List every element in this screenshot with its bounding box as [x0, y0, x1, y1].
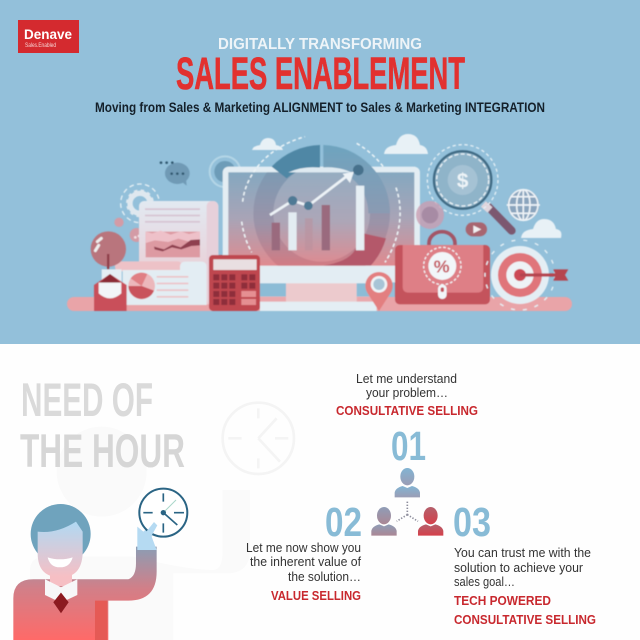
base bar [67, 297, 572, 311]
person 3 [418, 507, 443, 536]
step 3 text: solution to achieve your [454, 560, 584, 575]
step 3 text: sales goal… [454, 574, 515, 589]
briefcase with percent [395, 232, 490, 304]
bar chart [272, 186, 364, 250]
briefcase with percent: % [434, 257, 450, 277]
screen dial [254, 172, 390, 266]
magnifier with dollar [427, 145, 512, 231]
subtitle: Moving from Sales & Marketing ALIGNMENT to Sales & Marketing INTEGRATION [95, 100, 545, 115]
radar circle [210, 156, 240, 187]
location pin [365, 272, 393, 311]
lower panel background [0, 344, 640, 640]
step 2 text: the inherent value of [250, 554, 361, 569]
step 3 text [454, 545, 596, 627]
character with clock [13, 489, 187, 640]
person 1 [395, 468, 420, 497]
heading: digitally transforming: DIGITALLY TRANSFORMING [218, 36, 422, 53]
clouds [252, 134, 561, 238]
heading: need of the hour: THE HOUR [20, 424, 185, 477]
play button [466, 222, 487, 236]
gear [121, 184, 159, 223]
clock [139, 489, 187, 537]
heading: need of the hour [20, 373, 185, 477]
report document [139, 201, 218, 304]
magnifier with dollar: $ [457, 169, 469, 192]
step 1 text: Let me understand [356, 371, 457, 386]
watermark clock [223, 403, 294, 474]
step 1 text [336, 371, 478, 418]
growth arrow [270, 165, 364, 215]
people icon group [371, 468, 443, 536]
step 2 text [246, 540, 361, 603]
pie chart sheet [115, 261, 207, 305]
logo: Denave: Denave [24, 26, 72, 42]
header background [0, 0, 640, 344]
number 01: 01 [391, 423, 426, 469]
calculator [209, 255, 260, 311]
pointing finger [145, 522, 157, 537]
person 2 [371, 507, 397, 536]
sweater [13, 547, 157, 640]
screen [228, 172, 414, 266]
dashed arcs [242, 137, 400, 262]
small music bubbles [114, 218, 144, 242]
target with arrow [485, 240, 568, 310]
collar [45, 579, 77, 600]
balloon and envelope [91, 231, 127, 311]
pink gear [416, 201, 444, 229]
dial sector dark [272, 145, 320, 178]
neck [50, 570, 72, 586]
step 1 text: your problem… [366, 385, 448, 400]
frame top between sectors [288, 167, 352, 172]
globe [507, 189, 540, 221]
step 1 text: CONSULTATIVE SELLING [336, 403, 478, 418]
step 3 text: TECH POWERED [454, 593, 551, 608]
watermark figure [30, 427, 250, 640]
dial sector light [323, 145, 390, 213]
step 2 text: Let me now show you [246, 540, 361, 555]
chat bubbles [160, 161, 190, 186]
logo: Denave [18, 20, 79, 53]
hand [137, 522, 157, 550]
heading: need of the hour: NEED OF [21, 373, 153, 426]
connector dots [397, 502, 418, 521]
monitor [223, 137, 420, 311]
step 2 text: the solution… [288, 569, 361, 584]
title: sales enablement: SALES ENABLEMENT [176, 48, 465, 99]
tie [53, 593, 69, 613]
illustration: digital sales desk [67, 134, 572, 311]
sweater shadow [95, 601, 107, 640]
number 03: 03 [453, 499, 491, 545]
number 02: 02 [325, 499, 362, 545]
smile [48, 557, 73, 567]
monitor stand [260, 282, 377, 311]
step 2 text: VALUE SELLING [271, 588, 361, 603]
face [38, 522, 83, 577]
monitor frame [223, 167, 420, 282]
logo: Denave: Sales.Enabled [25, 43, 56, 49]
step 3 text: You can trust me with the [454, 545, 591, 560]
hair [31, 504, 91, 564]
step 3 text: CONSULTATIVE SELLING [454, 612, 596, 627]
